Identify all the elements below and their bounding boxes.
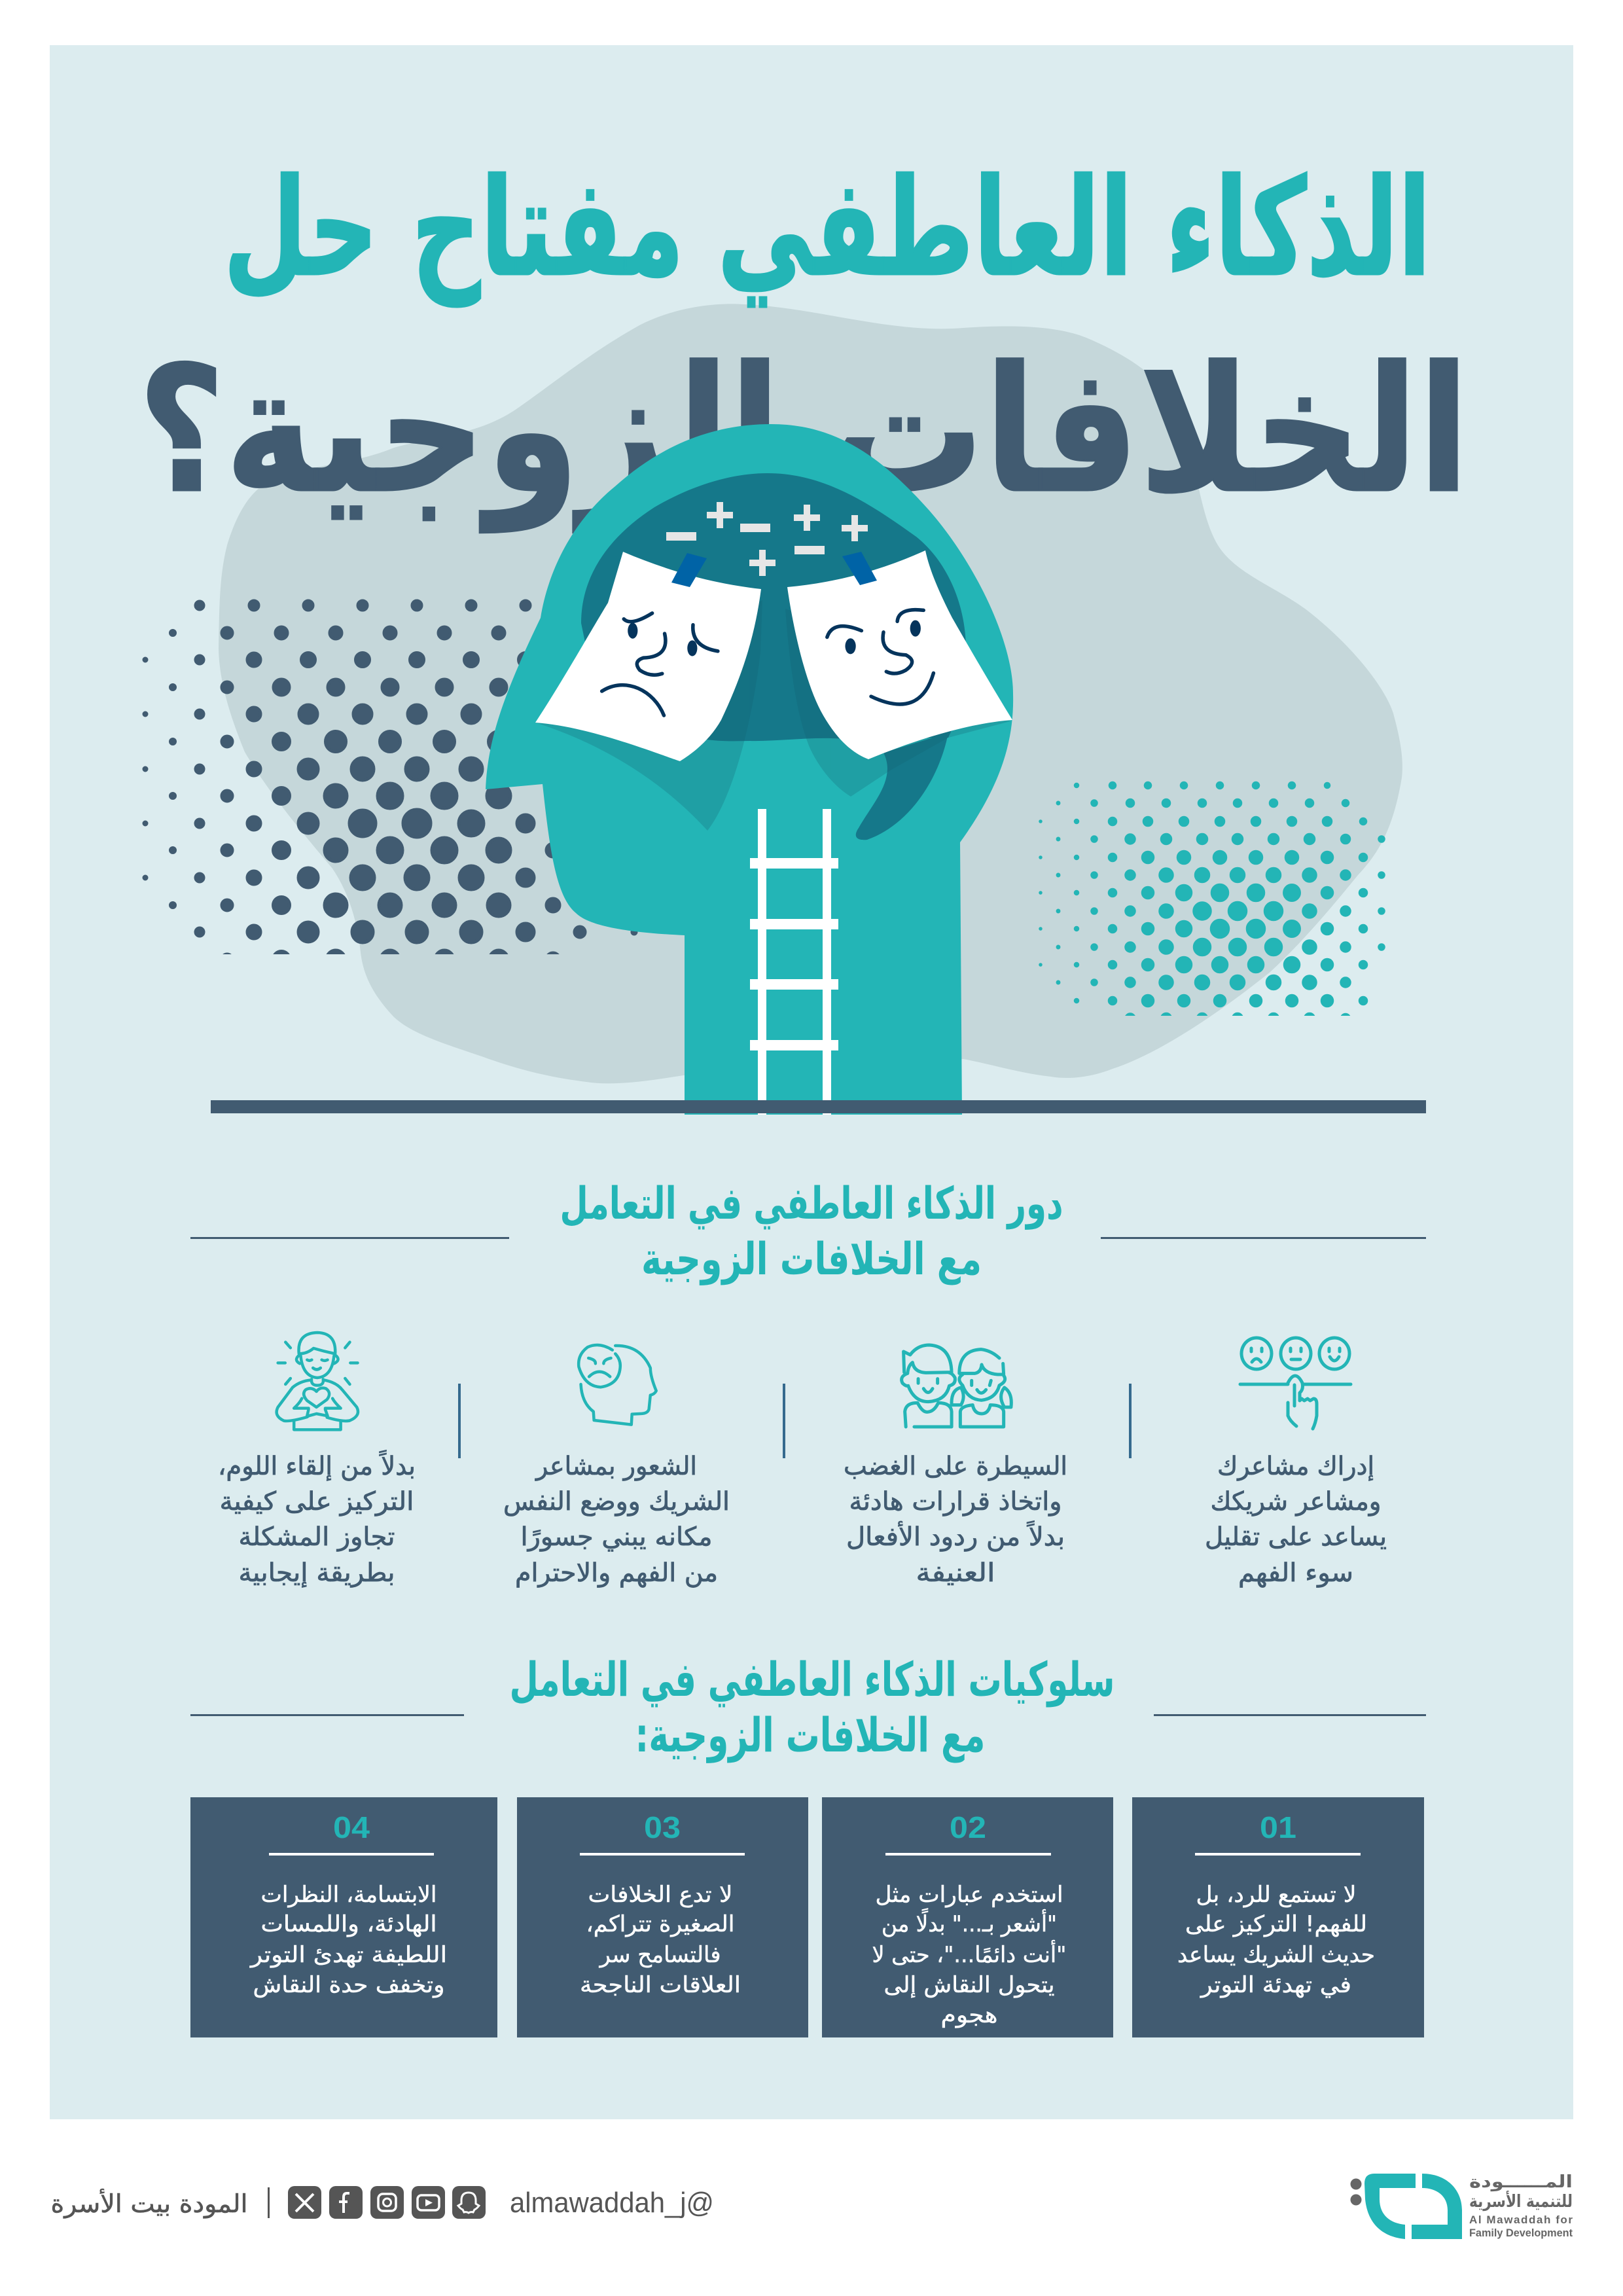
card 02 xyxy=(822,1797,1113,2037)
item 4: positivity: التركيز على كيفية xyxy=(220,1487,414,1516)
card 03: فالتسامح سر xyxy=(599,1942,721,1968)
card 01: للفهم! التركيز على xyxy=(1185,1911,1367,1937)
card 02: "أشعر بـ..." بدلًا من xyxy=(882,1908,1057,1937)
card 02: "أنت دائمًا..."، حتى لا xyxy=(872,1940,1067,1968)
item 1: awareness xyxy=(1205,1338,1387,1588)
item 1: awareness: إدراك مشاعرك xyxy=(1217,1452,1374,1481)
ground bar xyxy=(211,1100,1426,1113)
item 1: awareness: سوء الفهم xyxy=(1238,1558,1353,1588)
hair tail xyxy=(856,733,948,840)
item 4: positivity: تجاوز المشكلة xyxy=(238,1522,395,1552)
social icons xyxy=(288,2186,486,2219)
logo: للتنمية الأسرية xyxy=(1469,2191,1573,2212)
card 01 xyxy=(1132,1797,1424,2037)
item 2: anger control xyxy=(844,1345,1067,1588)
card 04: وتخفف حدة النقاش xyxy=(253,1972,445,1998)
card 01: حديث الشريك يساعد xyxy=(1177,1942,1375,1968)
section heading: role of EI xyxy=(190,1178,1426,1285)
plus and minus signs xyxy=(666,502,868,576)
card 02: يتحول النقاش إلى xyxy=(883,1972,1055,1998)
icon: angry face in head xyxy=(579,1345,656,1425)
card 04: الابتسامة، النظرات xyxy=(260,1882,437,1908)
logo: Al Mawaddah for xyxy=(1469,2214,1573,2226)
item 3: empathy xyxy=(503,1345,730,1588)
card 02: هجوم xyxy=(941,2002,997,2028)
shadow folds xyxy=(535,600,1010,831)
footer slogan: المودة بيت الأسرة xyxy=(51,2188,247,2219)
item 2: anger control: السيطرة على الغضب xyxy=(844,1452,1067,1481)
item 3: empathy: الشريك ووضع النفس xyxy=(503,1487,730,1516)
section heading: behaviours: مع الخلافات الزوجية: xyxy=(635,1708,986,1763)
footer separator xyxy=(268,2187,270,2218)
card 01: 01 xyxy=(1260,1810,1296,1844)
item 4: positivity xyxy=(218,1333,416,1588)
paper: sad face xyxy=(535,552,761,761)
icon: faces and hand xyxy=(1240,1338,1351,1429)
card 03: الصغيرة تتراكم، xyxy=(586,1911,734,1937)
card 04: اللطيفة تهدئ التوتر xyxy=(249,1942,447,1968)
tape xyxy=(842,552,877,585)
icon: X xyxy=(288,2186,321,2219)
card 04 xyxy=(190,1797,497,2037)
section heading: behaviours xyxy=(190,1652,1426,1763)
item 4: positivity: بدلاً من إلقاء اللوم، xyxy=(218,1449,416,1481)
item 1: awareness: ومشاعر شريكك xyxy=(1211,1487,1381,1516)
card 03: لا تدع الخلافات xyxy=(588,1882,733,1908)
item 1: awareness: يساعد على تقليل xyxy=(1205,1522,1387,1552)
halftone dots: teal xyxy=(1039,782,1385,1024)
card 02: استخدم عبارات مثل xyxy=(876,1882,1063,1908)
halftone dots: dark xyxy=(144,601,636,969)
section heading: behaviours: سلوكيات الذكاء العاطفي في التعامل xyxy=(509,1652,1115,1708)
card 01: في تهدئة التوتر xyxy=(1200,1972,1351,1998)
icon: instagram xyxy=(370,2186,404,2219)
item 3: empathy: الشعور بمشاعر xyxy=(535,1452,697,1481)
head silhouette xyxy=(486,424,1013,1115)
logo: Family Development xyxy=(1469,2227,1573,2239)
icon: youtube xyxy=(412,2186,445,2219)
logo mark xyxy=(1364,2174,1462,2239)
logo: المــــــودة xyxy=(1469,2172,1573,2192)
illustration: head with faces and ladder xyxy=(486,424,1013,1115)
item 2: anger control: واتخاذ قرارات هادئة xyxy=(849,1487,1061,1516)
icon: person holding heart xyxy=(277,1333,358,1429)
happy face features xyxy=(827,610,933,704)
sad face features xyxy=(602,613,718,715)
item 3: empathy: مكانه يبني جسورًا xyxy=(521,1522,712,1552)
head interior xyxy=(581,473,966,741)
column dividers xyxy=(458,1384,1132,1458)
background blob xyxy=(219,304,1402,1083)
card 03: 03 xyxy=(644,1810,681,1844)
section heading: role of EI: مع الخلافات الزوجية xyxy=(641,1234,982,1285)
item 2: anger control: العنيفة xyxy=(916,1558,995,1588)
card 04: 04 xyxy=(333,1810,370,1844)
card 03 xyxy=(517,1797,808,2037)
item 4: positivity: بطريقة إيجابية xyxy=(238,1558,395,1588)
footer handle: almawaddah_j@ xyxy=(510,2187,714,2219)
item 3: empathy: من الفهم والاحترام xyxy=(515,1558,718,1588)
tape xyxy=(671,553,707,587)
item 2: anger control: بدلاً من ردود الأفعال xyxy=(846,1520,1065,1552)
logo xyxy=(1351,2172,1573,2239)
icon: couple xyxy=(902,1345,1011,1427)
icon: facebook xyxy=(329,2186,363,2219)
section heading: role of EI: دور الذكاء العاطفي في التعامل xyxy=(560,1178,1063,1230)
card 02: 02 xyxy=(950,1810,986,1844)
card 03: العلاقات الناجحة xyxy=(580,1972,741,1998)
ladder xyxy=(750,809,838,1115)
paper: happy face xyxy=(787,550,1012,759)
card 01: لا تستمع للرد، بل xyxy=(1196,1882,1356,1908)
card 04: الهادئة، واللمسات xyxy=(260,1911,437,1937)
icon: snapchat xyxy=(452,2186,486,2219)
